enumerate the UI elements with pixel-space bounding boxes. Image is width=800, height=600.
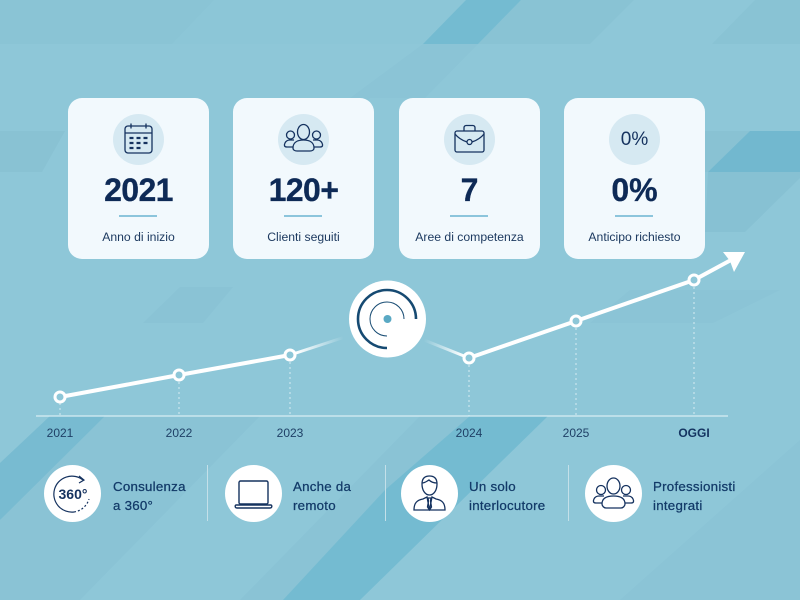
- stat card: Clienti seguiti: [233, 98, 374, 259]
- text: integrati: [653, 498, 703, 513]
- text: remoto: [293, 498, 336, 513]
- text: Professionisti: [653, 479, 736, 494]
- feature: Anche da remoto: [225, 465, 351, 522]
- trend line: [60, 260, 731, 397]
- text: Consulenza: [113, 479, 186, 494]
- label: Anticipo richiesto: Anticipo richiesto: [588, 230, 681, 244]
- label: Aree di competenza: Aree di competenza: [415, 230, 524, 244]
- logo disc: [349, 280, 426, 358]
- text: [113, 479, 186, 513]
- text: Anche da: [293, 479, 351, 494]
- feature: Professionisti integrati: [585, 465, 736, 522]
- icon: businessman: [401, 465, 458, 522]
- text: [469, 479, 545, 513]
- text: Un solo: [469, 479, 516, 494]
- year labels: [47, 426, 710, 440]
- feature: Un solo interlocutore: [401, 465, 545, 522]
- icon: calendar: [113, 114, 164, 165]
- icon: group of people: [278, 114, 329, 165]
- text: [653, 479, 736, 513]
- label: Anno di inizio: Anno di inizio: [102, 230, 175, 244]
- stat card: Anticipo richiesto: [564, 98, 705, 259]
- feature: Consulenza a 360°: [44, 465, 186, 522]
- stat card: Anno di inizio: [68, 98, 209, 259]
- data points: [55, 275, 699, 402]
- arrow head: [723, 252, 745, 272]
- number: 2021: 2021: [104, 172, 173, 208]
- icon: professionals group: [585, 465, 642, 522]
- stat card: Aree di competenza: [399, 98, 540, 259]
- text: a 360°: [113, 498, 153, 513]
- year labels: 2022: [166, 426, 192, 440]
- label: Clienti seguiti: Clienti seguiti: [267, 230, 340, 244]
- icon: laptop: [225, 465, 282, 522]
- number: 7: 7: [461, 172, 478, 208]
- text: interlocutore: [469, 498, 545, 513]
- year labels: OGGI: [678, 426, 710, 440]
- icon: zero percent: [609, 114, 660, 165]
- year labels: 2025: [563, 426, 589, 440]
- year labels: 2021: [47, 426, 73, 440]
- icon: 360: [44, 465, 101, 522]
- icon: 360: 360°: [59, 486, 87, 502]
- year labels: 2023: [277, 426, 303, 440]
- icon: zero percent: 0%: [621, 129, 648, 150]
- number: 0%: 0%: [611, 172, 658, 208]
- year labels: 2024: [456, 426, 482, 440]
- number: 120+: 120+: [269, 172, 338, 208]
- text: [292, 479, 351, 513]
- icon: briefcase: [444, 114, 495, 165]
